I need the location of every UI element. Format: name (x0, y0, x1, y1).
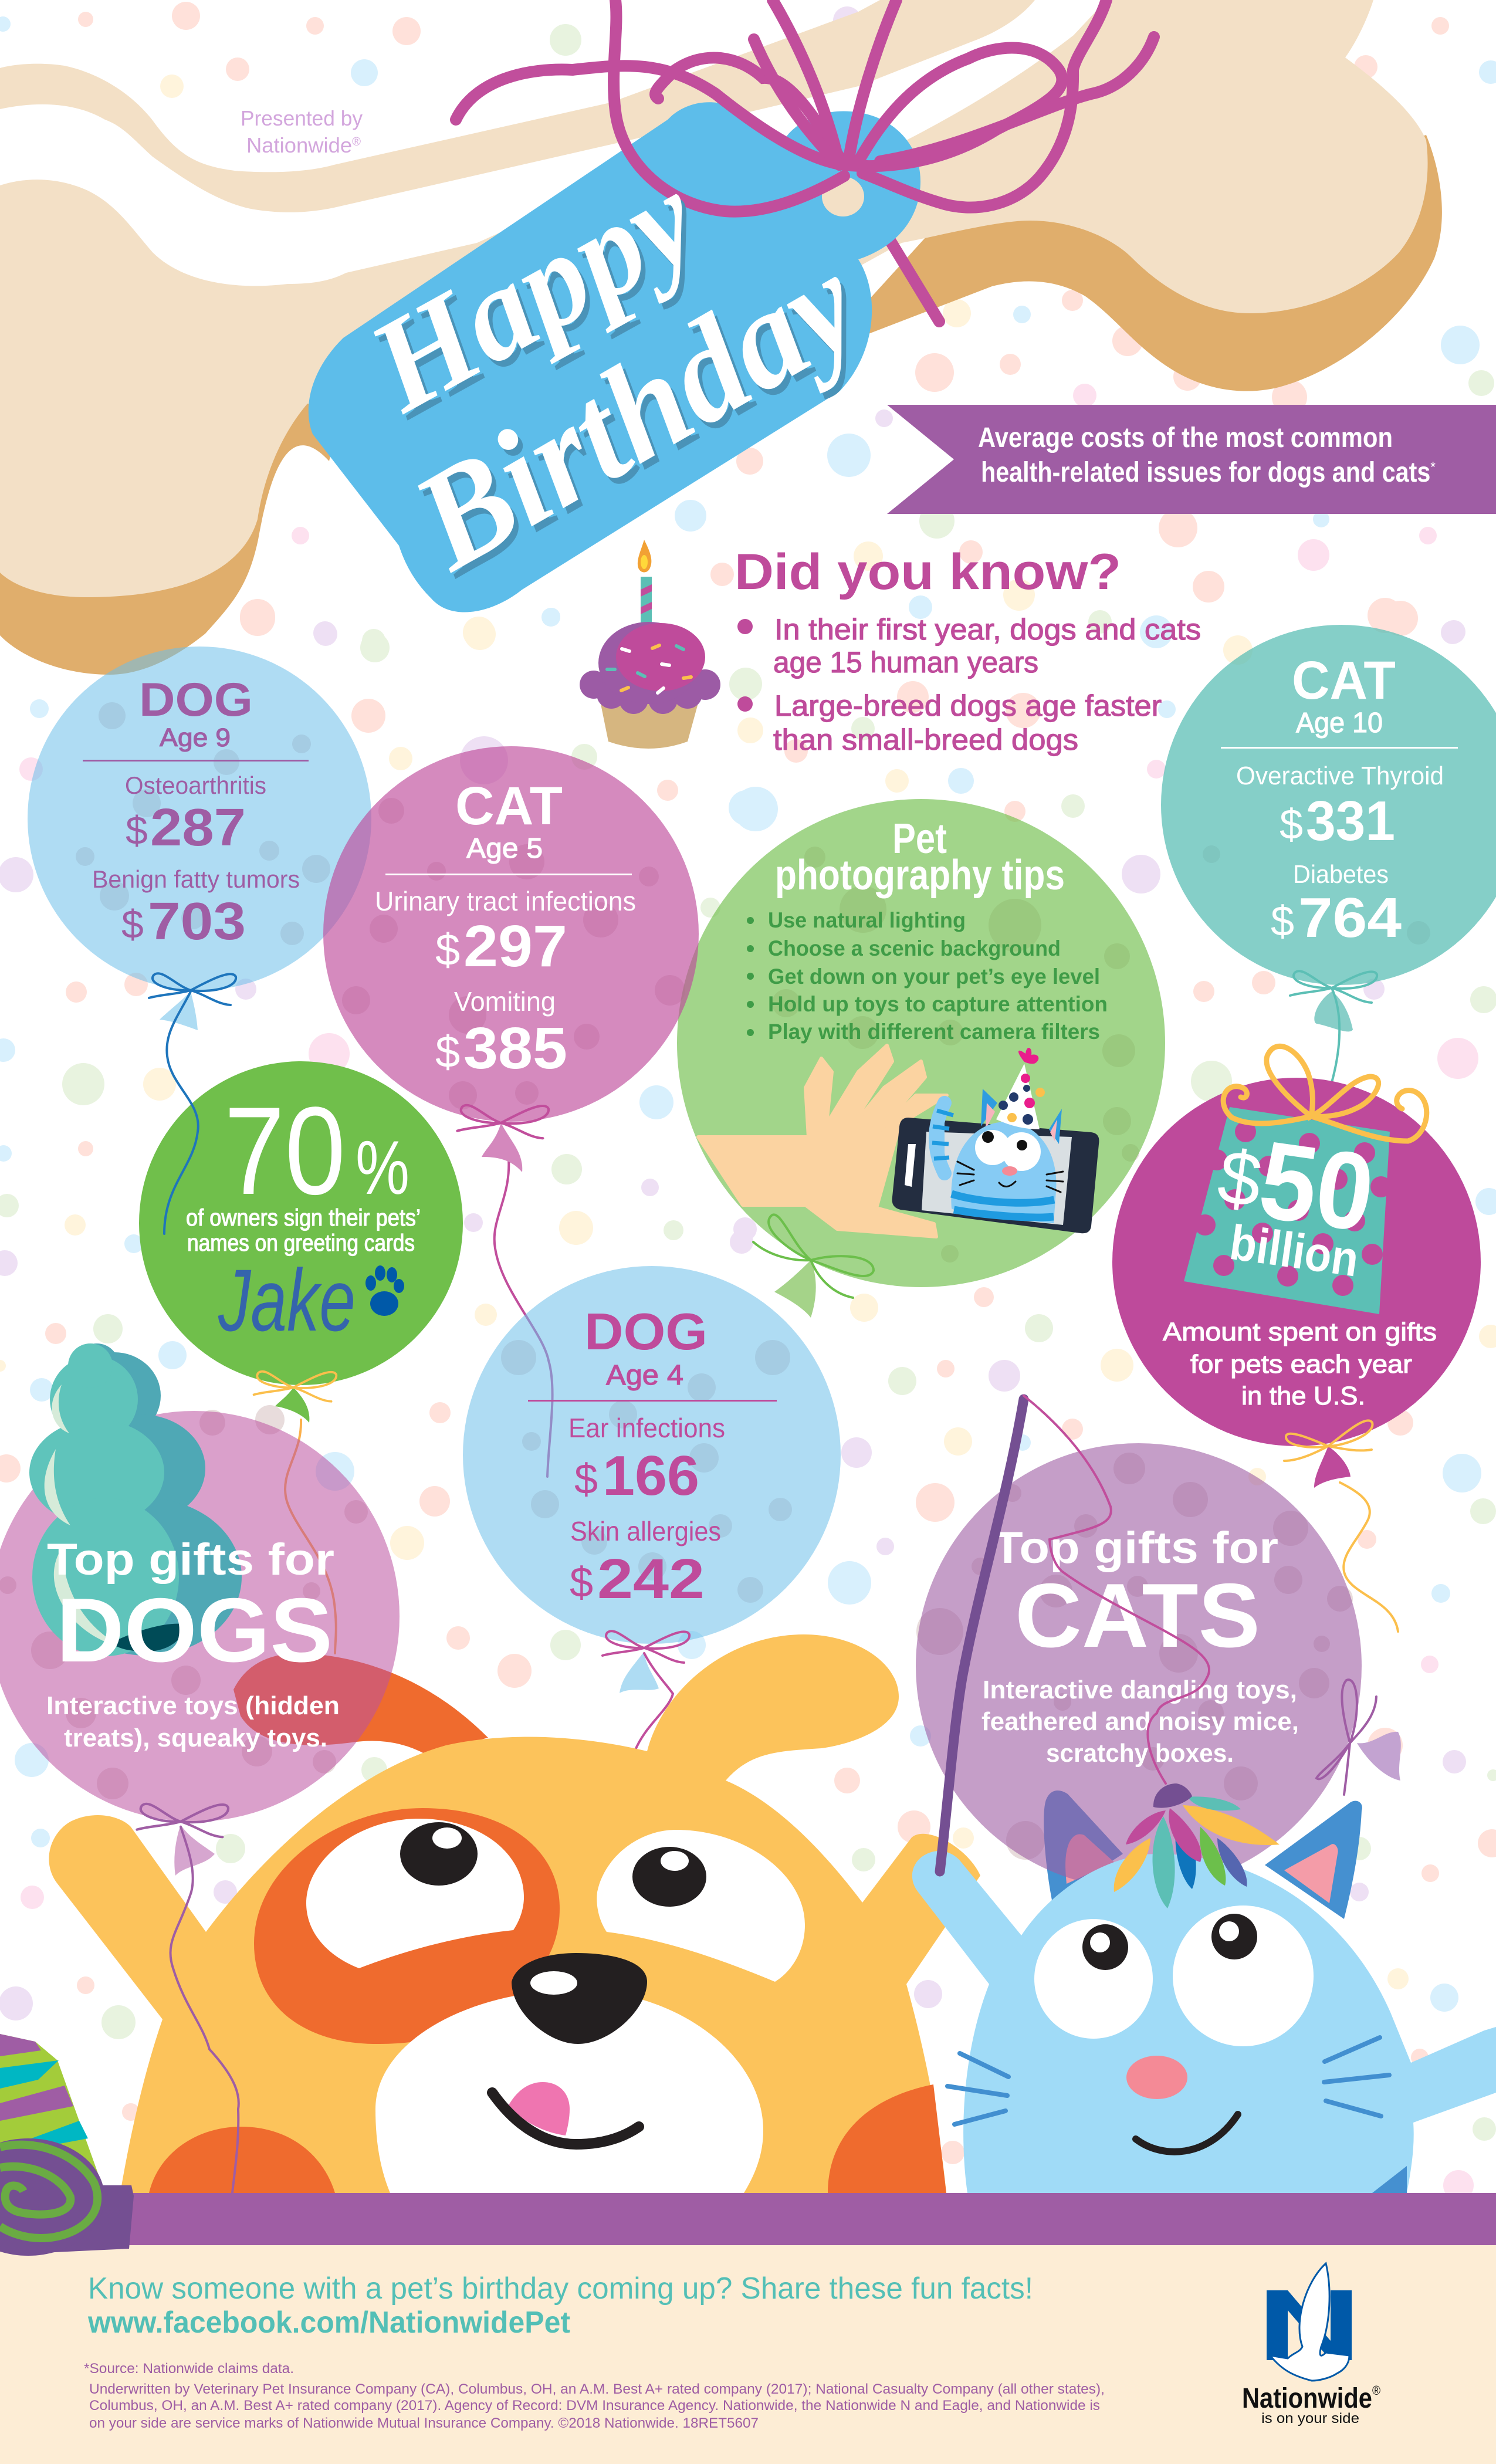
balloon: cat age 5 (323, 746, 699, 1172)
balloon: top gifts for dogs (0, 1411, 400, 1822)
icon: gift box: 50 (1253, 1118, 1381, 1255)
illustration: cat (912, 1851, 1496, 2193)
text: legal disclaimer: Underwritten by Veterinary Pet Insurance Company (CA), Columbus, OH, an A.M. Best A+ rated company (2017); National Casualty Company (all other states), (89, 2381, 1105, 2397)
icon: gift box (1184, 1046, 1427, 1314)
footer: cream background (0, 2245, 1496, 2464)
text: presented by: Nationwide (246, 133, 351, 157)
balloon: cat age 10: 764 (1298, 886, 1402, 949)
balloon: dog age 4: $ (574, 1456, 598, 1503)
text: share message: Know someone with a pet’s birthday coming up? Share these fun facts! (88, 2272, 1033, 2306)
icon: chew toy (29, 1343, 242, 1656)
string: gift balloon ribbon tail for 70 percent (285, 1420, 336, 1653)
icon: gift box: billion (1227, 1214, 1362, 1287)
balloon: dog age 4: Ear infections (568, 1413, 725, 1443)
list: tips: Use natural lighting (768, 908, 966, 932)
panel: did you know: than small-breed dogs (773, 723, 1078, 756)
balloon: cat age 10: $ (1271, 898, 1294, 945)
text: top gifts for cats: scratchy boxes. (1046, 1739, 1234, 1768)
ribbon bow (456, 0, 1154, 212)
heading: pet photography tips: Pet (892, 815, 947, 862)
heading shadow: Birthday (392, 229, 889, 605)
text: share message (87, 2272, 1033, 2340)
text: top gifts for cats: Interactive dangling toys, (983, 1676, 1297, 1704)
title: gift tag with ribbon and Happy Birthday (309, 0, 1154, 612)
illustration: cat on phone screen (932, 1048, 1063, 1223)
illustration: cat right ear (1265, 1801, 1362, 1919)
text: share message: www.facebook.com/NationwidePet (87, 2306, 570, 2340)
text: legal disclaimer: Columbus, OH, an A.M. Best A+ rated company (2017). Agency of Record: DVM Insurance Agency. Nationwide, the Nationwide N and Eagle, and Nationwide is (89, 2398, 1100, 2414)
banner: average costs: health-related issues for dogs and cats (981, 457, 1496, 488)
balloon: top gifts for cats (916, 1443, 1362, 1889)
heading shadow: Happy (350, 149, 726, 446)
footer: purple bar (0, 2193, 1496, 2245)
balloon: 70 percent: % (356, 1125, 409, 1210)
panel: did you know (735, 544, 1201, 756)
banner: average costs: Average costs of the most common (978, 422, 1393, 453)
balloon: cat age 10: Age 10 (1296, 708, 1383, 739)
text: top gifts for dogs: treats), squeaky toys. (64, 1724, 327, 1752)
illustration: orange dog ear (233, 1653, 488, 1754)
feathers (1114, 1783, 1280, 1908)
list: tips: Hold up toys to capture attention (768, 992, 1108, 1016)
balloon: dog age 9: $ (126, 808, 148, 853)
balloon: cat age 10: $ (1280, 801, 1303, 848)
balloon: cat age 10: CAT (1292, 651, 1396, 710)
text: top gifts for cats: feathered and noisy mice, (981, 1707, 1299, 1736)
text: top gifts for dogs: DOGS (56, 1579, 333, 1681)
balloon: 50 billion: Amount spent on gifts (1163, 1318, 1437, 1346)
illustration: dog (49, 1634, 980, 2193)
balloon: 70 percent: names on greeting cards (187, 1230, 415, 1256)
logo: Nationwide (1242, 2263, 1380, 2426)
illustration: hand holding phone (698, 1045, 1099, 1237)
balloon: cat age 10: Overactive Thyroid (1236, 761, 1444, 790)
string: cat age 5 balloon (495, 1151, 553, 1477)
balloon: dog age 9: Age 9 (160, 723, 231, 752)
text: top gifts for cats: Top gifts for (993, 1523, 1278, 1573)
text: top gifts for cats (981, 1523, 1299, 1768)
text: legal disclaimer: *Source: Nationwide claims data. (84, 2361, 294, 2377)
heading: Happy Birthday: Birthday (388, 223, 884, 600)
balloon: cat age 5: $ (435, 1027, 460, 1077)
text: presented by: Presented by (241, 106, 363, 130)
balloon: dog age 4: $ (570, 1559, 593, 1606)
balloon: cat age 5: $ (435, 925, 460, 975)
list: tips: Get down on your pet’s eye level (768, 964, 1100, 989)
list: tips (747, 908, 1108, 1044)
text: top gifts for dogs: Interactive toys (hidden (46, 1691, 340, 1720)
heading: pet photography tips: photography tips (775, 852, 1065, 899)
text: legal disclaimer: on your side are service marks of Nationwide Mutual Insurance Company. ©2018 Nationwide. 18RET5607 (89, 2415, 759, 2431)
balloon: pet photography tips (677, 799, 1165, 1318)
balloon: dog age 4: Skin allergies (570, 1516, 721, 1546)
balloon: cat age 5: Age 5 (466, 833, 543, 864)
text: top gifts for dogs: Top gifts for (47, 1535, 334, 1585)
icon: party horn (0, 2034, 134, 2256)
illustration: bone background (0, 0, 1442, 675)
balloon: cat age 5: 297 (463, 913, 567, 979)
illustration: cat left ear (1044, 1791, 1123, 1900)
logo: Nationwide: is on your side (1261, 2411, 1359, 2426)
icon: gift box: $ (1213, 1133, 1267, 1224)
balloon: 50 billion: for pets each year (1190, 1350, 1412, 1379)
balloon: 70 percent: 70 (224, 1081, 346, 1221)
balloon: 50 billion (1112, 1046, 1481, 1632)
balloon: cat age 10: 331 (1306, 790, 1395, 852)
balloon: cat age 10: Diabetes (1293, 860, 1389, 889)
text: presented by (241, 106, 363, 157)
balloon: 70 percent: of owners sign their pets’ (186, 1205, 421, 1231)
banner: average costs (887, 405, 1496, 514)
panel: did you know: In their first year, dogs and cats (774, 613, 1201, 646)
text: presented by: ® (352, 136, 361, 148)
string: balloon tie for cats (1316, 1680, 1401, 1795)
panel: did you know: Large-breed dogs age faster (774, 689, 1162, 722)
text: top gifts for dogs (46, 1535, 340, 1752)
balloon: cat age 5: 385 (463, 1016, 567, 1081)
text: legal disclaimer (84, 2361, 1105, 2431)
balloon: dog age 4: 242 (597, 1548, 705, 1610)
balloon: 50 billion: in the U.S. (1241, 1382, 1365, 1410)
panel: did you know: age 15 human years (773, 646, 1038, 679)
balloon: 70 percent (139, 1061, 463, 1423)
balloon: cat age 5: Urinary tract infections (375, 886, 636, 916)
list: tips: Choose a scenic background (768, 936, 1061, 960)
balloon: dog age 9: DOG (139, 673, 253, 726)
heading: pet photography tips (775, 815, 1065, 899)
balloon: dog age 9: 287 (150, 798, 246, 857)
banner: average costs: * (1430, 458, 1436, 476)
balloon: dog age 9: $ (121, 902, 144, 947)
balloon: dog age 9: 703 (148, 892, 246, 951)
panel: did you know: Did you know? (735, 544, 1121, 600)
icon: cupcake with candle (580, 540, 720, 749)
illustration: wand toy (940, 1396, 1280, 1908)
balloon: dog age 4: Age 4 (606, 1360, 683, 1391)
balloon: dog age 4 (463, 1266, 841, 1751)
logo: Nationwide: ® (1372, 2383, 1380, 2398)
balloon: cat age 5: CAT (455, 776, 563, 836)
balloon: cat age 10 (1161, 625, 1496, 1082)
logo: Nationwide: Nationwide (1242, 2383, 1392, 2414)
balloon: 70 percent: Jake (218, 1251, 356, 1349)
string: dog age 9 balloon (149, 973, 236, 1234)
balloon: dog age 4: DOG (584, 1302, 708, 1360)
balloon: cat age 5: Vomiting (454, 986, 556, 1017)
icon: paw (365, 1265, 404, 1316)
balloon: dog age 9: Benign fatty tumors (92, 865, 300, 893)
string: top gifts dogs balloon (137, 1804, 239, 2193)
list: tips: Play with different camera filters (768, 1020, 1100, 1044)
balloon: dog age 9 (28, 647, 371, 990)
heading: Happy Birthday: Happy (346, 143, 721, 440)
balloon: dog age 4: 166 (603, 1444, 699, 1507)
text: top gifts for cats: CATS (1015, 1565, 1260, 1666)
balloon: dog age 9: Osteoarthritis (125, 771, 266, 799)
